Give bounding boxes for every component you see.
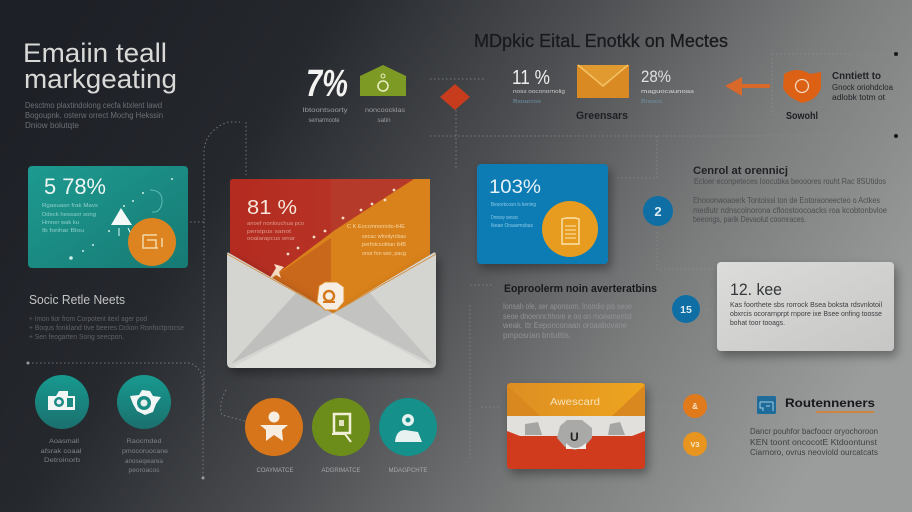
badge: blue 2: 2 (654, 204, 662, 219)
white card text: obxrcis ocorarnprpt rnpore ixe Bsee onfing toosse (730, 309, 882, 318)
labels: top icons: noncoocklas (365, 107, 406, 114)
intro text: Dniow bolutqte (25, 121, 80, 130)
icon: orange shield (783, 70, 821, 103)
icon: 7% glyph: 7% (306, 63, 348, 105)
label: envelope: Greensars (576, 110, 628, 122)
text: corporate: Ionsah ole, ser aponsom, Inondio pis seoe (503, 302, 632, 311)
icon: document circle (542, 201, 598, 257)
social heading: Socic Retle Neets (29, 292, 125, 307)
teal card text: Hmner wak ku (42, 220, 79, 226)
blue card value: 103% (489, 177, 541, 198)
text: corporate (502, 302, 633, 340)
blue card text: Dmnsoy owours (491, 215, 518, 221)
envelope text right: onor fon wer, pacg (362, 251, 406, 257)
panel: teal stat card (28, 166, 188, 268)
title: Emaiin teall (23, 38, 167, 68)
title (23, 38, 177, 94)
icon: green house (360, 65, 406, 96)
icon: envelope seal (317, 282, 344, 310)
icon: clasp: U (570, 430, 579, 444)
teal card text (42, 203, 98, 234)
orange underline (816, 411, 874, 413)
heading: corporate: Eoproolerm noin averteratbins (504, 283, 657, 295)
labels: bottom circles: ADGRIMATCE (322, 467, 361, 474)
label: left circle: Detroinorb (44, 457, 80, 464)
text: routeners (750, 427, 878, 457)
text: corporate: weak. ttr Eeponconaan oroaabovane (502, 321, 628, 330)
label: shield: Sowohl (786, 111, 818, 122)
text: shield (832, 71, 894, 102)
stat: 28%: Brsoco (641, 99, 662, 105)
social text (29, 316, 184, 341)
labels: top icons (302, 107, 406, 124)
envelope body (227, 252, 436, 368)
intro text: Desctmo plaxtindolong cecfa ktxlent lawd (25, 101, 162, 110)
stat: 28%: 28% (641, 67, 671, 86)
icon: teal user circle (379, 398, 437, 456)
icon: orange envelope (577, 65, 629, 98)
intro text (25, 101, 163, 130)
blue card text: Beoorkcosn ls kening (491, 202, 536, 208)
heading: routeners: Routenneners (785, 396, 875, 410)
label: middle circle: Raocmded (126, 438, 162, 445)
label: left circle (40, 438, 82, 464)
title: markgeating (24, 64, 177, 94)
envelope text left: ooalarapcus wnar (247, 236, 295, 242)
stat: 11%: 11 % (512, 67, 550, 89)
dotted arrow (268, 189, 395, 281)
envelope text right (347, 224, 406, 257)
envelope text left (247, 221, 304, 242)
badge: orange bottom: V3 (690, 440, 700, 449)
envelope text left: persipus sanot (247, 229, 292, 235)
white card value: 12. kee (730, 280, 782, 299)
label: middle circle (122, 438, 168, 474)
arrow (725, 77, 770, 96)
text: control: Ehooonwoaoerk Tontoissi ton de Eotoraoneecteo o Actkes (693, 196, 880, 205)
badge: blue 15: 15 (680, 304, 692, 316)
icon: teal camera circle (35, 375, 89, 429)
envelope value: 81 % (247, 197, 297, 219)
social text: + Sen feogarten Song seecpon, (29, 334, 124, 341)
text: control: medlutr ndnscolnorona cfloostoocoacks roa kcobtonbvloe (693, 206, 888, 215)
badge: orange top (683, 394, 707, 418)
card label: Awescard (550, 397, 600, 408)
text: control: beeongs, parik Devaolut coomraces. (693, 215, 806, 224)
text: shield: adlobk totm ot (832, 93, 886, 102)
text: corporate: pmposrian bntulitis. (503, 331, 571, 340)
icon: white triangle (111, 208, 132, 225)
heading: top centre: MDpkic EitaL Enotkk on Mectes (474, 31, 728, 51)
stat: 11%: Bsourcos (513, 99, 542, 105)
social text: + Imon tior from Corpotent itexl ager pod (29, 316, 147, 323)
teal card text: Ib fonhar Blou (42, 228, 84, 234)
intro text: Bogoupnk. osterw orrect Mochg Hekssin (25, 111, 163, 120)
teal card dotted trend line (69, 178, 173, 260)
labels: bottom circles (256, 467, 428, 474)
panel: white card (717, 262, 894, 351)
connector lines (28, 54, 896, 478)
text: control: Ecloer econpeteces Ioocubka beooores rouht Rac 8SUtidos (694, 177, 886, 186)
text: control (693, 177, 888, 224)
text: shield: Gnock oriohdcloa (832, 83, 894, 92)
text: routeners: Dancr pouhfor bacfoocr oryochoroon (750, 427, 878, 436)
blue card text: Ikeae Oraaemsbas (491, 223, 533, 229)
labels: top icons: satin (378, 117, 391, 124)
badge: orange bottom (683, 432, 707, 456)
envelope text right: C K Eoccmnonirdo-tHE (347, 224, 405, 230)
icon: blue square (757, 396, 776, 414)
text: corporate: seoe dnoennchhore e oo on moeamentst (503, 312, 633, 321)
labels: bottom circles: COAYMATCE (256, 467, 294, 474)
label: middle circle: anoseqwarea (125, 458, 163, 465)
teal card text: Ddeck hessaor song (42, 212, 96, 218)
icon: teal eye circle (117, 375, 171, 429)
icon: orange circle (128, 218, 176, 266)
label: left circle: Aoasmall (49, 438, 80, 445)
labels: top icons: semarmoote (308, 117, 340, 124)
label: middle circle: pmocoruocane (122, 448, 168, 455)
panel: central envelope (227, 179, 436, 368)
heading: control: Cenrol at orennicj (693, 165, 788, 177)
text: shield: Cnntiett to (832, 71, 881, 82)
icon: green document circle (312, 398, 370, 456)
badge: orange top: & (692, 402, 698, 411)
blue card text (491, 202, 536, 229)
white card text (730, 300, 882, 327)
envelope letter card (230, 179, 430, 320)
teal card value: 5 78% (44, 174, 106, 199)
label: left circle: afsrak coaal (40, 448, 82, 455)
white card text: bohat toor tooags. (730, 318, 785, 327)
text: routeners: KEN toont oncocotE Ktdoontunst (750, 438, 878, 447)
icon: red diamond (440, 84, 470, 110)
panel: orange red envelope card (507, 383, 645, 469)
labels: bottom circles: MDAGPCHTE (388, 467, 428, 474)
stat: 11% (512, 67, 565, 105)
stat: 28%: maguocaunoas (641, 89, 694, 95)
text: routeners: Ciarnoro, ovrus neoviold ourcatcats (750, 448, 878, 457)
badge: blue 15 (672, 295, 700, 323)
envelope text right: perfotcsotitan tHB (362, 242, 406, 248)
badge: blue 2 (643, 196, 673, 226)
connector end dots (26, 52, 898, 480)
social text: + Boqus fonkland tive beeres Dckon Ronfoctprocse (29, 325, 184, 332)
label: middle circle: peoroacos (128, 467, 160, 474)
stat: 28% (641, 67, 694, 105)
envelope text right: secac wfoolyrcbas (362, 234, 406, 240)
icon: orange person circle (245, 398, 303, 456)
labels: top icons: Ibtoontsoorty (302, 107, 348, 114)
stat: 11%: noss ooconornolig (513, 89, 565, 95)
teal card text: Rgasuasn frak Mavs (42, 203, 98, 209)
envelope text left: anoef nonlouchua pco (247, 221, 304, 227)
panel: blue stat card (477, 164, 608, 264)
white card text: Kas foorthete sbs rorrock Bsea boksta rdsvnlotoil (730, 300, 882, 309)
